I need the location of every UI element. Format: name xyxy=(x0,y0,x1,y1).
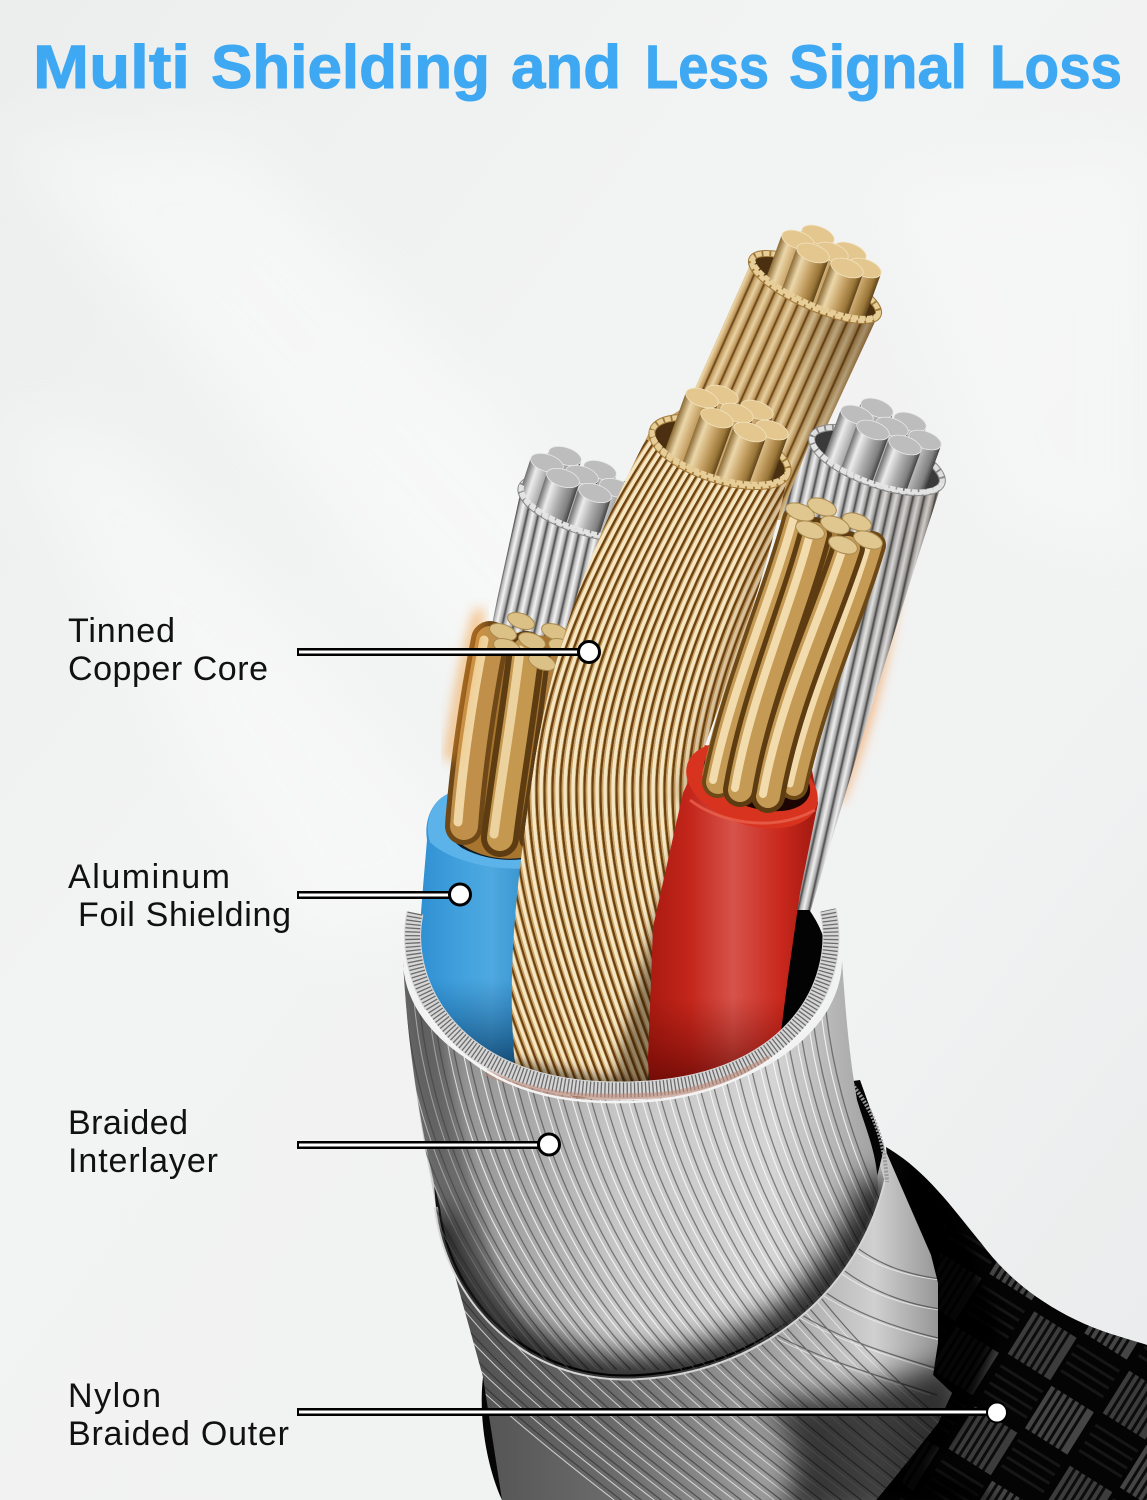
small right gold strands xyxy=(702,520,885,801)
callout: braided interlayer xyxy=(297,1134,560,1155)
title: Less xyxy=(645,33,769,101)
lower braided ring xyxy=(434,1080,952,1500)
label: aluminum foil shielding xyxy=(68,858,291,934)
title xyxy=(33,33,1122,101)
label: aluminum foil shielding: Aluminum xyxy=(68,858,230,896)
small left gold end faces xyxy=(487,609,578,674)
label: nylon braided outer xyxy=(68,1377,289,1453)
title: Multi xyxy=(33,33,190,101)
title: Loss xyxy=(990,33,1122,101)
label: tinned copper core: Tinned xyxy=(68,612,175,650)
label: nylon braided outer: Nylon xyxy=(68,1377,161,1415)
callout: aluminum foil shielding xyxy=(297,884,470,905)
wire: right silver strand bundle xyxy=(782,398,946,912)
label: braided interlayer xyxy=(68,1104,218,1180)
callout: tinned copper core xyxy=(297,642,600,662)
wire: big central twisted gold bundle xyxy=(512,384,792,1098)
glow: orange flare left xyxy=(450,610,480,760)
nylon braided outer sleeve xyxy=(482,1147,1147,1500)
title: Shielding xyxy=(211,33,490,101)
label: braided interlayer: Interlayer xyxy=(68,1142,218,1180)
small left gold strands xyxy=(446,628,578,859)
label: braided interlayer: Braided xyxy=(68,1104,188,1142)
jacket: blue with gold core xyxy=(419,609,578,1078)
title: Signal xyxy=(789,33,967,101)
title: and xyxy=(511,33,621,101)
braided interlayer cuff xyxy=(403,908,884,1378)
glow: orange flare right xyxy=(835,590,892,800)
callout: nylon braided outer xyxy=(297,1402,1007,1422)
small right gold end faces xyxy=(783,494,885,558)
hole inside the cuff xyxy=(514,910,822,1080)
label: tinned copper core xyxy=(68,612,268,688)
label: tinned copper core: Copper Core xyxy=(68,650,268,688)
wire: top gold strand bundle xyxy=(695,224,882,520)
label: aluminum foil shielding: Foil Shielding xyxy=(78,896,291,934)
jacket: red with gold core xyxy=(648,494,885,1095)
cuff top rim xyxy=(413,910,831,1102)
label: nylon braided outer: Braided Outer xyxy=(68,1415,289,1453)
wire: left silver strand bundle xyxy=(492,446,625,636)
